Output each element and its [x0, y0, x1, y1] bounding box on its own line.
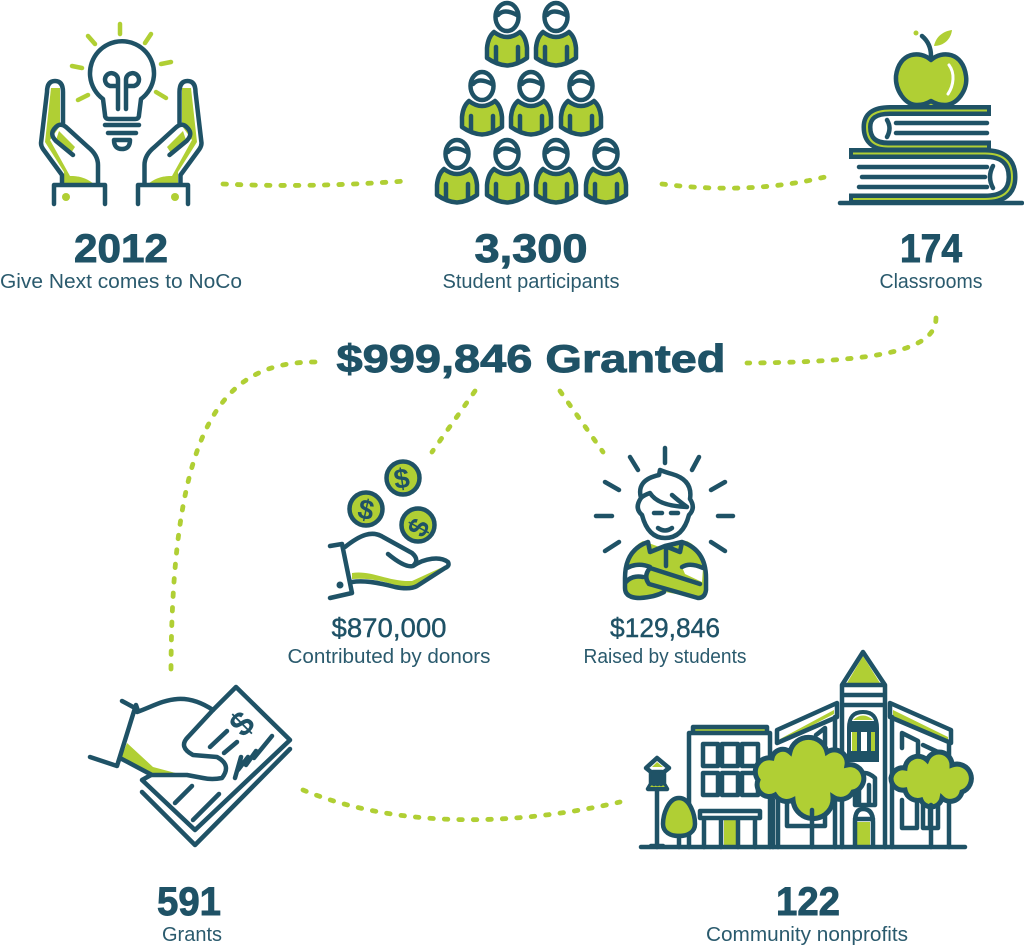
- donors stat: [288, 613, 490, 668]
- icon: hand with coins: $: [392, 462, 412, 495]
- grants stat: 591: [157, 880, 221, 924]
- icon: hand with coins: [330, 462, 449, 598]
- connector: grants to nonprofits: [303, 790, 620, 820]
- grants stat: Grants: [162, 924, 222, 946]
- icon: proud student: [596, 448, 733, 598]
- connector: granted to students raised: [560, 391, 603, 452]
- donors stat: Contributed by donors: [288, 646, 490, 668]
- icon: hand on check: $: [222, 704, 262, 744]
- grants stat: [157, 880, 222, 946]
- students raised stat: [584, 613, 746, 668]
- year stat: 2012: [74, 227, 168, 271]
- year stat: Give Next comes to NoCo: [0, 271, 242, 293]
- classroom stat: Classrooms: [880, 271, 982, 293]
- icon: hand with coins: $: [355, 493, 377, 527]
- icon: student group: [437, 3, 626, 202]
- nonprofits stat: Community nonprofits: [706, 924, 908, 946]
- student stat: Student participants: [442, 271, 620, 293]
- icon: apple on books: [840, 30, 1022, 203]
- headline: total granted: $999,846 Granted: [336, 338, 726, 381]
- icon: hand with coins: $: [401, 513, 436, 542]
- year stat: [0, 227, 242, 293]
- students raised stat: $129,846: [610, 613, 720, 643]
- connector: students to classrooms: [662, 177, 825, 188]
- students raised stat: Raised by students: [584, 646, 746, 668]
- classroom stat: 174: [900, 227, 963, 271]
- classroom stat: [880, 227, 982, 293]
- connector: granted to grants: [171, 362, 315, 670]
- icon: town buildings and trees: [641, 652, 971, 847]
- student stat: [442, 227, 620, 293]
- nonprofits stat: [706, 880, 908, 946]
- connector: granted to donors: [432, 391, 475, 452]
- connector: 2012 to students: [223, 181, 405, 185]
- donors stat: $870,000: [332, 613, 446, 643]
- student stat: 3,300: [474, 227, 588, 271]
- nonprofits stat: 122: [776, 880, 840, 924]
- connector: classrooms to granted: [747, 318, 936, 363]
- icon: hand on check: [90, 687, 290, 845]
- icon: hands holding lightbulb: [41, 24, 202, 204]
